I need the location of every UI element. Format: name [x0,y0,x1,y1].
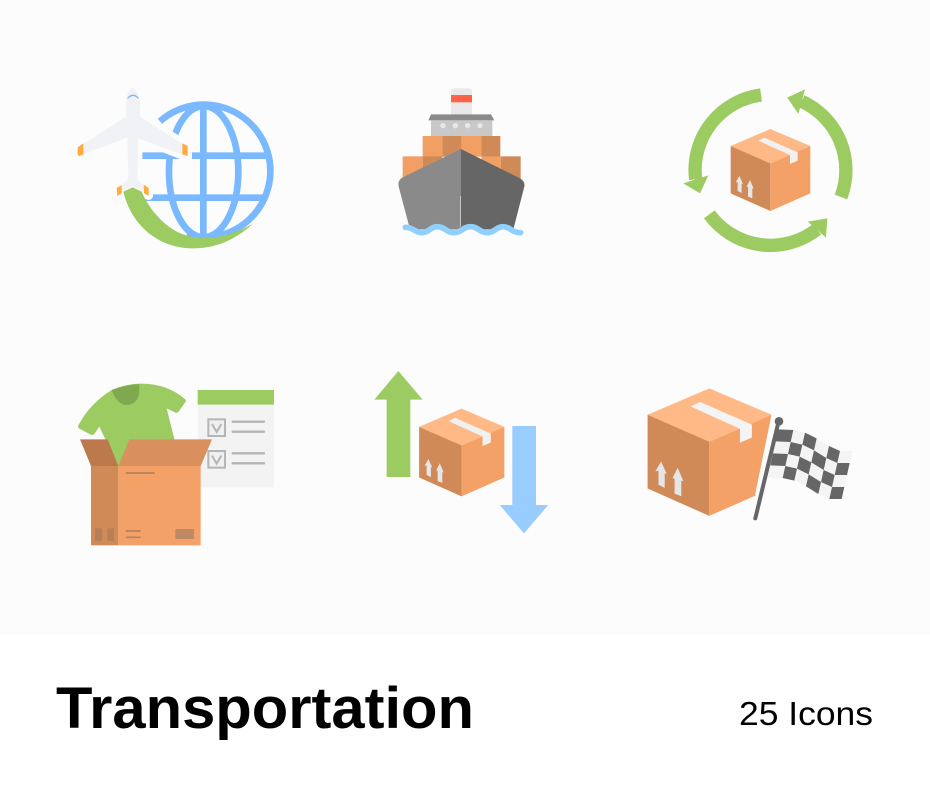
icon: box with up and down arrows [374,371,548,533]
checkered flag [755,417,852,518]
checklist [198,390,274,487]
icon count label: 25 Icons [739,695,873,732]
plane windshield [128,95,138,98]
plane body [83,88,183,191]
title: Transportation [56,676,474,741]
icon: container ship [398,88,524,233]
up arrow [374,371,423,477]
green flight trail [123,187,253,248]
icon: recycling box [683,89,846,245]
funnel [451,88,472,115]
green shirt [78,384,186,467]
icon: airplane and globe [78,88,270,248]
water waves [405,227,521,233]
globe [142,105,270,238]
cargo containers [403,136,521,181]
plane engine tips [78,143,188,196]
bridge roof [428,114,494,120]
parcel [731,129,810,211]
cardboard box [80,439,212,545]
icon: box with checkered flag [648,388,852,518]
hull [398,149,524,229]
bridge [431,120,492,136]
icon: open box with shirt and checklist [78,384,274,545]
down arrow [500,426,548,533]
parcel [419,409,504,496]
plane halo [78,88,188,196]
parcel [648,388,772,516]
circular arrows [683,89,846,245]
